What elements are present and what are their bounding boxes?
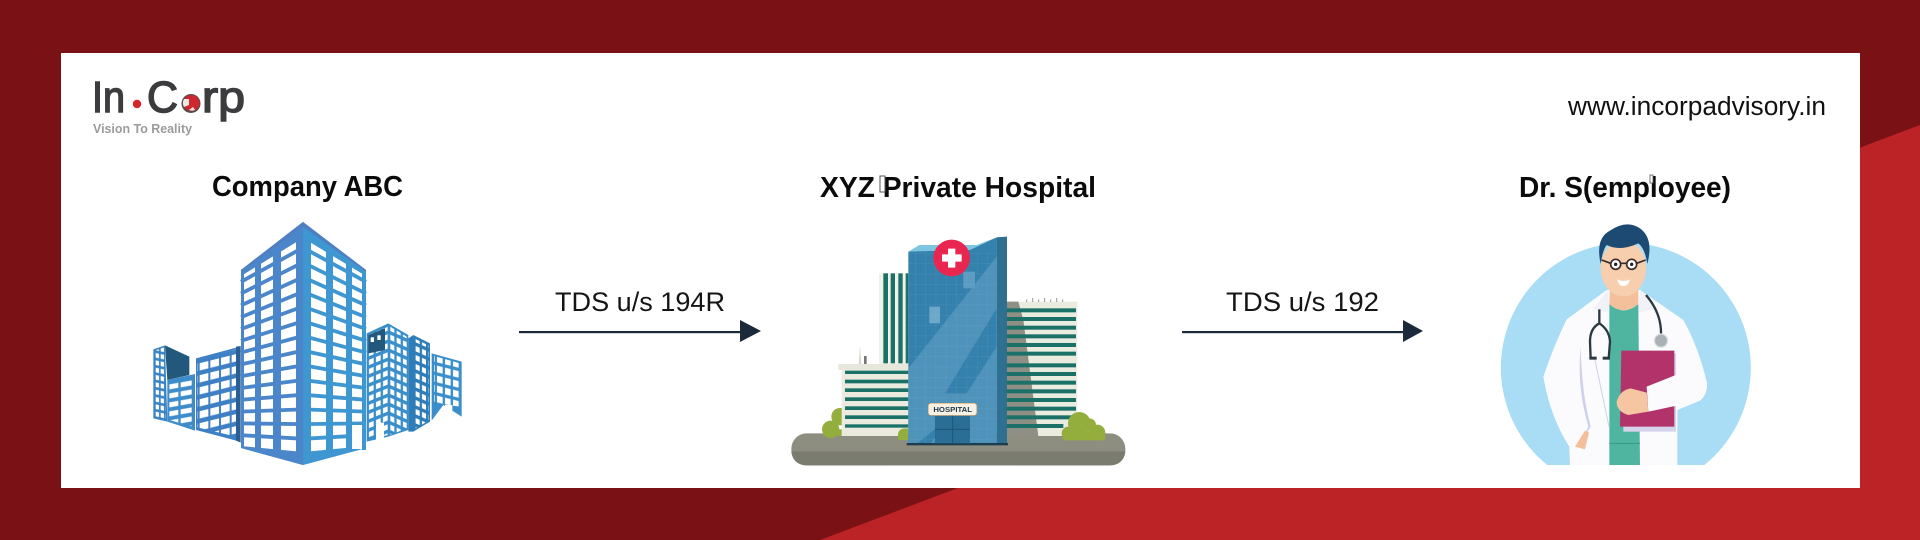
illustration: office buildings — [153, 222, 462, 465]
hair — [1599, 224, 1649, 264]
small bush — [898, 428, 908, 440]
logo: In.Corp: C — [147, 73, 178, 122]
hospital sign — [928, 403, 977, 415]
right wing — [1007, 302, 1077, 436]
heading: XYZ Private Hospital: XYZ Private Hospital — [820, 172, 1096, 204]
smile — [1617, 279, 1630, 286]
heading: Company ABC: Company ABC — [212, 171, 403, 203]
glass tower — [908, 237, 1007, 257]
main tower floor bands left — [241, 248, 303, 439]
neck — [1609, 283, 1638, 310]
hand — [1617, 388, 1648, 415]
hospital sign: HOSPITAL — [933, 405, 972, 414]
white content panel — [61, 53, 1860, 488]
white coat — [1543, 290, 1707, 465]
website url: www.incorpadvisory.in — [1567, 93, 1826, 121]
stethoscope — [1590, 295, 1661, 359]
arrow: TDS u/s 194R — [519, 287, 761, 342]
main tower faces — [241, 222, 303, 465]
logo: In.Corp — [92, 73, 245, 136]
road — [791, 433, 1125, 465]
side buildings left — [153, 323, 462, 443]
main tower door — [352, 425, 362, 449]
tower base line — [907, 443, 1008, 445]
back tower — [879, 273, 908, 365]
illustration: doctor — [1501, 224, 1751, 465]
right sleeve — [1647, 371, 1707, 412]
red cross badge — [933, 240, 970, 276]
clipboard — [1623, 353, 1676, 432]
side buildings right — [367, 323, 408, 442]
arrow: TDS u/s 192 — [1182, 287, 1423, 342]
logo: In.Corp: Vision To Reality — [93, 121, 193, 136]
main tower windows — [244, 237, 362, 453]
pocket hand — [1575, 431, 1589, 449]
pale blue circle — [1501, 243, 1751, 465]
doors — [935, 416, 970, 443]
main tower floor bands right — [303, 248, 366, 439]
background: bright red diagonal — [820, 125, 1920, 540]
face — [1601, 240, 1646, 296]
left low wing — [859, 345, 861, 364]
logo: In.Corp: In — [92, 73, 125, 122]
glasses — [1602, 259, 1646, 269]
scrubs — [1609, 304, 1640, 465]
collar — [1593, 289, 1657, 313]
arrow: TDS u/s 194R: TDS u/s 194R — [555, 287, 725, 317]
heading: Dr. S (employee): Dr. S(employee) — [1519, 172, 1731, 204]
rooftop detail — [1027, 298, 1063, 302]
right bush — [1062, 412, 1105, 441]
glass highlights — [908, 257, 997, 444]
arrow: TDS u/s 192: TDS u/s 192 — [1226, 287, 1379, 317]
left bush — [822, 408, 849, 438]
illustration: hospital — [791, 237, 1125, 465]
logo: In.Corp: rp — [202, 73, 245, 122]
coat shadow — [1577, 347, 1591, 450]
